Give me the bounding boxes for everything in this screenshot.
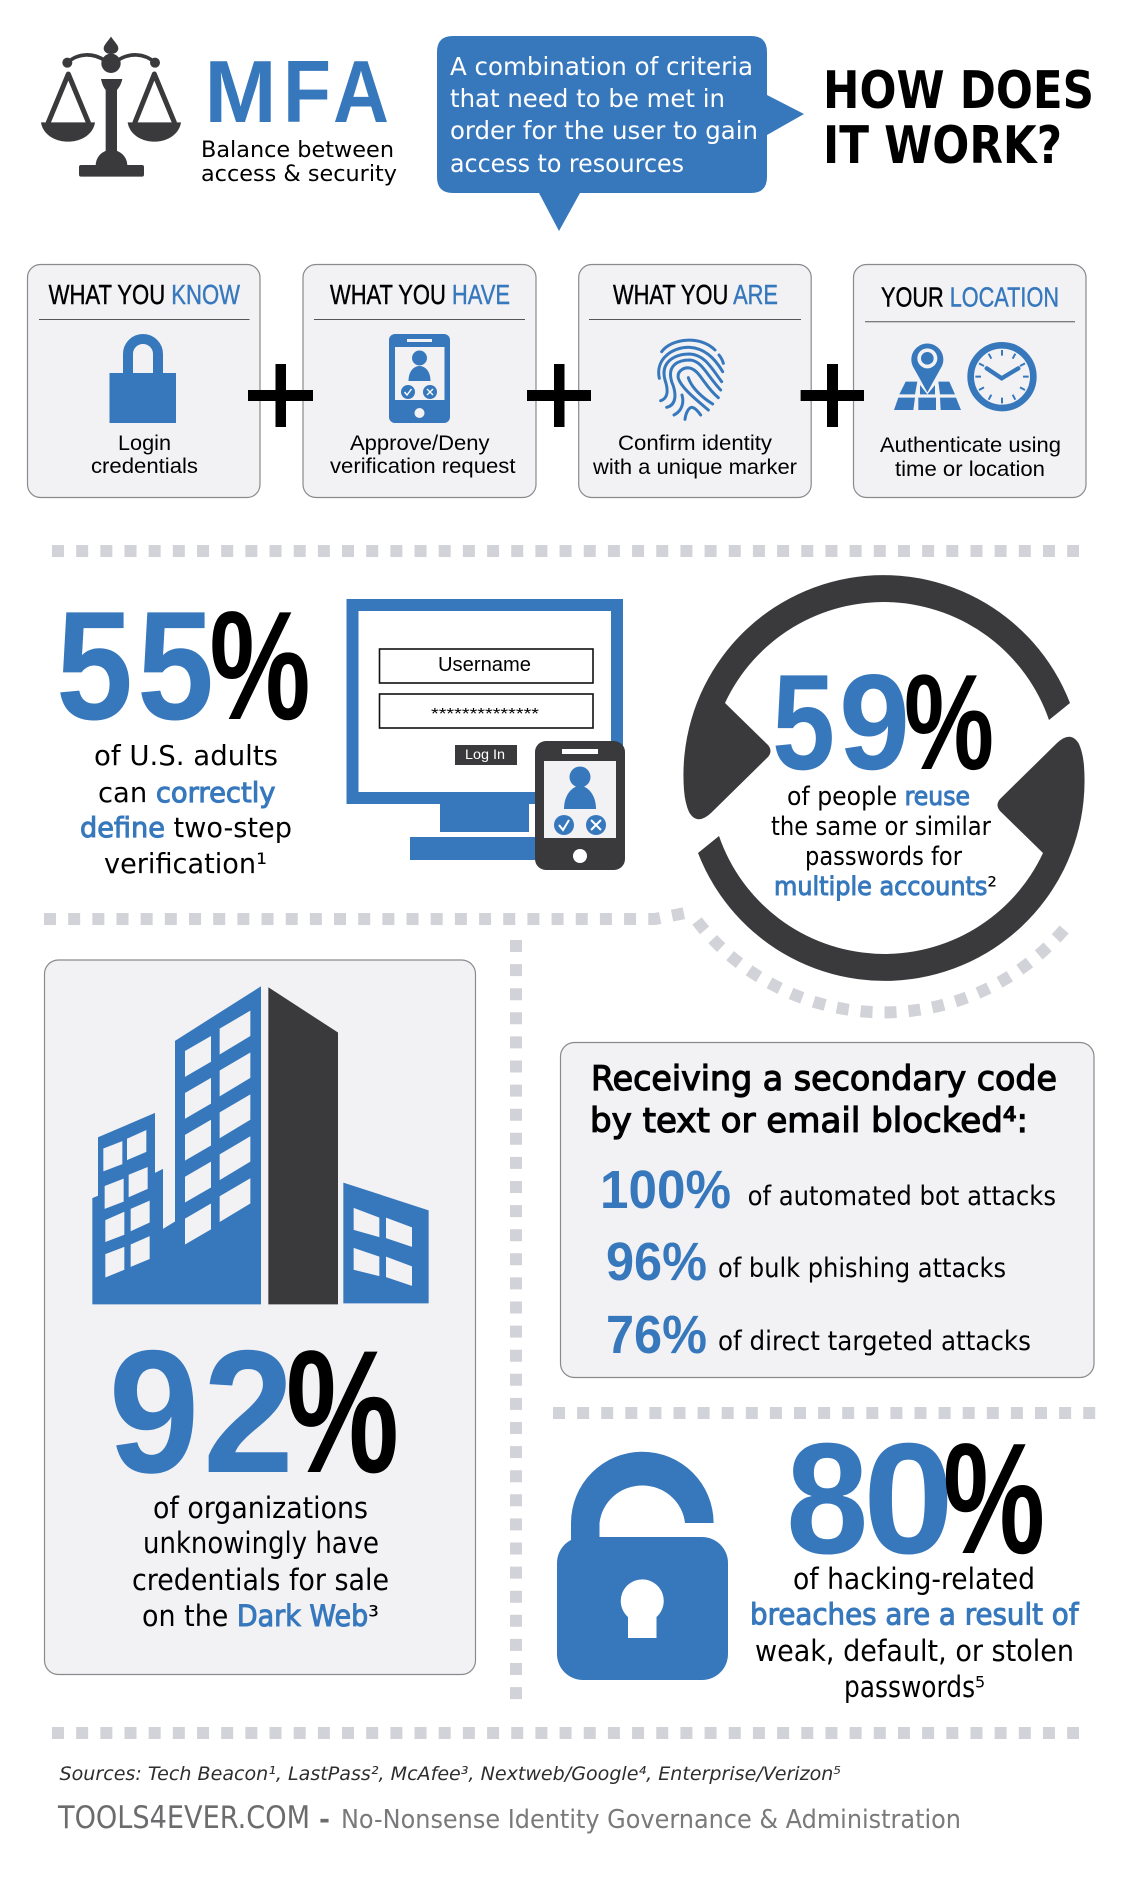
callout: speech bubble definition: order for the user to gain (450, 116, 758, 145)
text: 80 percent description: passwords⁵ (844, 1670, 985, 1704)
footer: tools4ever tagline: TOOLS4EVER.COM (57, 1800, 310, 1836)
callout: speech bubble definition: that need to be met in (450, 84, 725, 113)
subtitle: balance between access and security: access & security (201, 162, 397, 187)
stat row: 96 percent: of bulk phishing attacks (718, 1253, 1006, 1284)
text: approve or deny verification request: Approve/Deny (350, 432, 490, 455)
panel: secondary code blocked attacks (560, 1042, 1094, 1378)
text: 80 percent description (750, 1562, 1079, 1704)
text: 59 percent description: of people reuse (787, 782, 970, 812)
text: 92 percent description: on the Dark Web³ (142, 1599, 379, 1633)
text: authenticate using time or location: Authenticate using (880, 434, 1061, 457)
footer: tools4ever tagline (57, 1800, 961, 1836)
text: confirm identity with a unique marker: Confirm identity (618, 432, 773, 455)
text: confirm identity with a unique marker: with a unique marker (592, 456, 797, 479)
icon: plus sign 2 (527, 364, 591, 427)
panel: what you have: WHAT YOU HAVE (330, 279, 510, 310)
stat row: 100 percent (600, 1160, 1056, 1220)
text: 55 percent description: can correctly (98, 776, 276, 809)
text: 55 percent description (80, 739, 292, 880)
illustration: computer login screen: Log In (465, 746, 505, 762)
stat: 92 percent: % (286, 1315, 399, 1510)
panel: what you have (303, 264, 536, 498)
icon: fingerprint (659, 340, 723, 419)
text: 92 percent description: of organizations (153, 1491, 368, 1525)
title: MFA: A (333, 42, 389, 141)
icon: plus sign 3 (801, 364, 864, 427)
stat: 92 percent: 9 (108, 1315, 200, 1510)
text: 55 percent description: define two-step (80, 811, 292, 844)
stat row: 100 percent: 100% (600, 1160, 731, 1220)
text: 92 percent description (132, 1491, 389, 1633)
text: 59 percent description (771, 782, 997, 902)
panel: your location: YOUR LOCATION (881, 282, 1059, 313)
stat: 80 percent: 0 (863, 1411, 954, 1587)
subtitle: balance between access and security (201, 138, 397, 187)
text: login credentials (91, 432, 198, 478)
text: login credentials: Login (118, 432, 171, 455)
text: 55 percent description: verification¹ (104, 847, 267, 880)
stat: 59 percent: 9 (839, 646, 910, 798)
illustration: computer login screen: ************** (431, 706, 539, 723)
stat: 55 percent: 5 (56, 579, 133, 752)
text: confirm identity with a unique marker (592, 432, 797, 479)
text: 92 percent description: credentials for sale (132, 1563, 389, 1597)
heading: receiving a secondary code: Receiving a secondary code (591, 1059, 1057, 1099)
stat row: 76 percent: 76% (606, 1305, 707, 1365)
heading: how does it work (823, 61, 1094, 176)
text: approve or deny verification request (330, 432, 516, 478)
icon: padlock (110, 339, 176, 423)
title: MFA: F (283, 42, 331, 141)
callout: speech bubble definition (437, 36, 804, 231)
stat: 59 percent: 5 (772, 646, 835, 798)
icon: scales of balance (41, 37, 181, 177)
text: 92 percent description: unknowingly have (143, 1526, 379, 1560)
illustration: computer login screen (352, 605, 617, 860)
stat: 55 percent: % (210, 579, 310, 752)
icon: smartphone with user (535, 741, 625, 870)
stat: 80 percent: 8 (786, 1411, 868, 1587)
icon: clock (971, 345, 1033, 408)
panel: what you are: WHAT YOU ARE (613, 279, 778, 310)
heading: receiving a secondary code (590, 1059, 1057, 1141)
stat: 55 percent: 5 (137, 579, 214, 752)
panel: 92 percent dark web (44, 960, 476, 1674)
heading: how does it work: IT WORK? (823, 116, 1062, 176)
stat: 92 percent: 2 (203, 1315, 294, 1510)
callout: speech bubble definition: A combination of criteria (450, 52, 753, 81)
stat row: 100 percent: of automated bot attacks (748, 1181, 1056, 1212)
subtitle: balance between access and security: Balance between (201, 138, 394, 163)
text: 59 percent description: multiple accounts² (774, 872, 997, 902)
callout: speech bubble definition: access to resources (450, 149, 684, 178)
text: 59 percent description: passwords for (805, 842, 962, 872)
stat row: 96 percent (606, 1232, 1006, 1292)
icon: plus sign 1 (248, 364, 313, 427)
text: 80 percent description: of hacking-related (793, 1562, 1035, 1596)
text: login credentials: credentials (91, 455, 198, 478)
icon: open padlock (557, 1452, 728, 1680)
panel: what you know: WHAT YOU KNOW (49, 279, 240, 310)
heading: receiving a secondary code: by text or email blocked⁴: (590, 1101, 1028, 1141)
text: authenticate using time or location: time or location (895, 458, 1045, 481)
footer: tools4ever tagline: - (319, 1805, 330, 1835)
stat row: 76 percent (606, 1305, 1031, 1365)
stat: 80 percent: % (943, 1411, 1045, 1587)
text: 80 percent description: weak, default, or stolen (755, 1634, 1074, 1668)
illustration: computer login screen: Username (438, 654, 531, 676)
icon: circular reuse arrows (683, 575, 1085, 981)
panel: what you know (28, 264, 260, 498)
text: approve or deny verification request: verification request (330, 455, 516, 478)
text: authenticate using time or location (880, 434, 1061, 481)
text: 55 percent description: of U.S. adults (94, 739, 278, 772)
footer: tools4ever tagline: No-Nonsense Identity Governance & Administration (341, 1805, 961, 1835)
text: 80 percent description: breaches are a result of (750, 1598, 1079, 1632)
icon: map with location pin (894, 343, 961, 410)
icon: smartphone approve or deny (389, 334, 450, 423)
text: 59 percent description: the same or similar (771, 812, 991, 842)
panel: what you are (579, 264, 811, 498)
icon: office buildings (92, 986, 429, 1304)
title: MFA: M (204, 42, 276, 141)
stat: 59 percent: % (904, 646, 994, 798)
panel: your location (854, 264, 1086, 498)
stat row: 76 percent: of direct targeted attacks (718, 1326, 1031, 1357)
stat row: 96 percent: 96% (606, 1232, 707, 1292)
text: sources: Sources: Tech Beacon¹, LastPass², McAfee³, Nextweb/Google⁴, Enterprise/Verizon⁵ (60, 1763, 841, 1785)
